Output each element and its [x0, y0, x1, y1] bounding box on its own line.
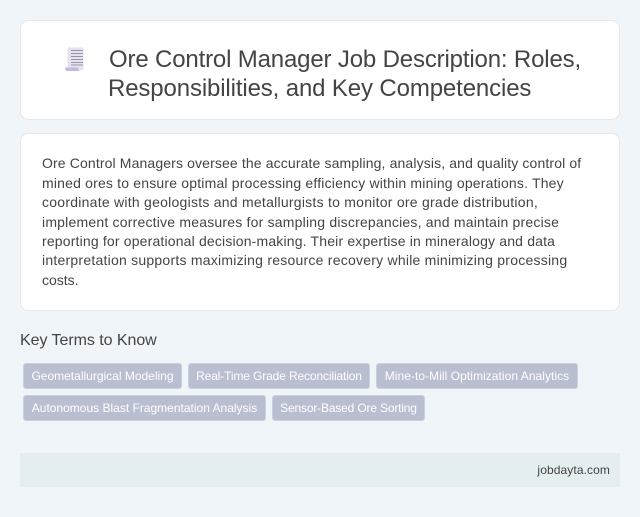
- description text: interpretation supports maximizing resource recovery while minimizing processing: [42, 252, 567, 268]
- tag: Autonomous Blast Fragmentation Analysis: [23, 395, 266, 421]
- footer bar: [20, 453, 620, 487]
- tag: Real-Time Grade Reconciliation: [188, 363, 370, 389]
- tag: Real-Time Grade Reconciliation: Real-Time Grade Reconciliation: [196, 369, 362, 383]
- description text: coordinate with geologists and metallurgists to monitor ore grade distribution,: [42, 194, 538, 210]
- tag: Autonomous Blast Fragmentation Analysis: Autonomous Blast Fragmentation Analysis: [32, 401, 257, 415]
- tag: Geometallurgical Modeling: Geometallurgical Modeling: [31, 369, 174, 383]
- tag: Geometallurgical Modeling: [23, 363, 182, 389]
- heading: key terms: Key Terms to Know: [20, 332, 157, 349]
- description text: [42, 155, 582, 288]
- panel: description card: [20, 133, 620, 311]
- description text: costs.: [42, 272, 79, 288]
- tag: Sensor-Based Ore Sorting: [272, 395, 425, 421]
- description text: mined ores to ensure optimal processing efficiency within mining operations. They: [42, 175, 564, 191]
- description text: reporting for operational decision-making. Their expertise in mineralogy and data: [42, 233, 555, 249]
- title: Responsibilities, and Key Competencies: [108, 75, 531, 102]
- tag: Sensor-Based Ore Sorting: Sensor-Based Ore Sorting: [280, 401, 417, 415]
- tag: Mine-to-Mill Optimization Analytics: Mine-to-Mill Optimization Analytics: [385, 369, 569, 383]
- footer source: jobdayta.com: [537, 463, 610, 477]
- panel: title card: [20, 20, 620, 120]
- title: [108, 46, 581, 102]
- tag: Mine-to-Mill Optimization Analytics: [376, 363, 578, 389]
- title: Ore Control Manager Job Description: Roles,: [109, 46, 581, 73]
- description text: implement corrective measures for sampling discrepancies, and maintain precise: [42, 214, 559, 230]
- description text: Ore Control Managers oversee the accurate sampling, analysis, and quality control of: [42, 155, 581, 171]
- icon: document scroll: [65, 47, 84, 71]
